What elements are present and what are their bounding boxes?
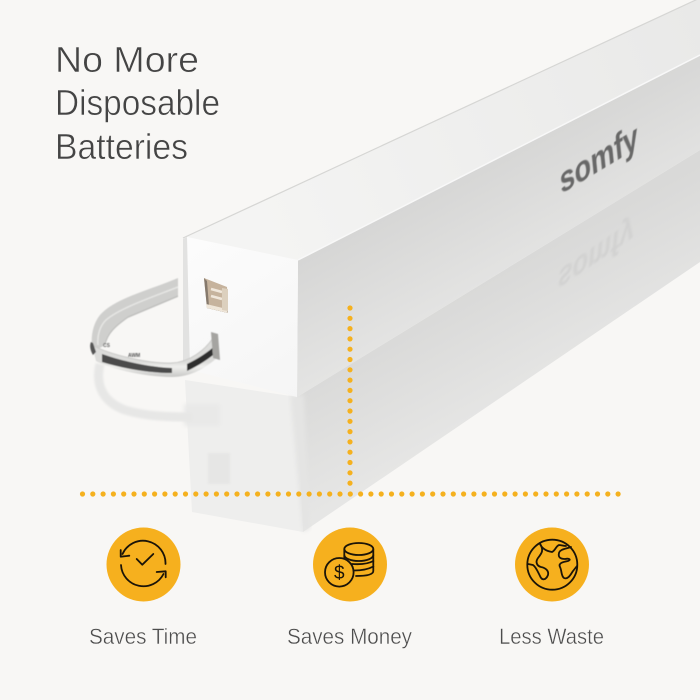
- product: front face: [187, 237, 298, 397]
- title: Batteries: [55, 126, 188, 167]
- title: No More: [55, 39, 199, 80]
- dotted horizontal line: [82, 491, 620, 497]
- connector socket: [204, 278, 228, 313]
- icon: less waste: [515, 528, 589, 602]
- icon: saves time: [106, 528, 180, 602]
- label: less waste: Less Waste: [499, 624, 604, 649]
- product: top face: [183, 0, 700, 260]
- icon: saves money: [313, 528, 387, 602]
- title: Disposable: [55, 82, 220, 123]
- label: saves money: Saves Money: [287, 624, 412, 649]
- product reflection: somfy: [556, 210, 636, 301]
- label: saves time: Saves Time: [89, 624, 197, 649]
- cable: CS: [103, 343, 111, 349]
- somfy logo: somfy: [558, 116, 640, 202]
- icon: saves money: $: [334, 563, 345, 584]
- cable: [90, 278, 220, 377]
- product: side face: [297, 55, 700, 397]
- dotted vertical line: [347, 308, 353, 490]
- product: top edge line: [183, 0, 700, 238]
- product reflection: [99, 150, 700, 532]
- cable: AWM: [128, 353, 140, 359]
- title: [55, 39, 220, 167]
